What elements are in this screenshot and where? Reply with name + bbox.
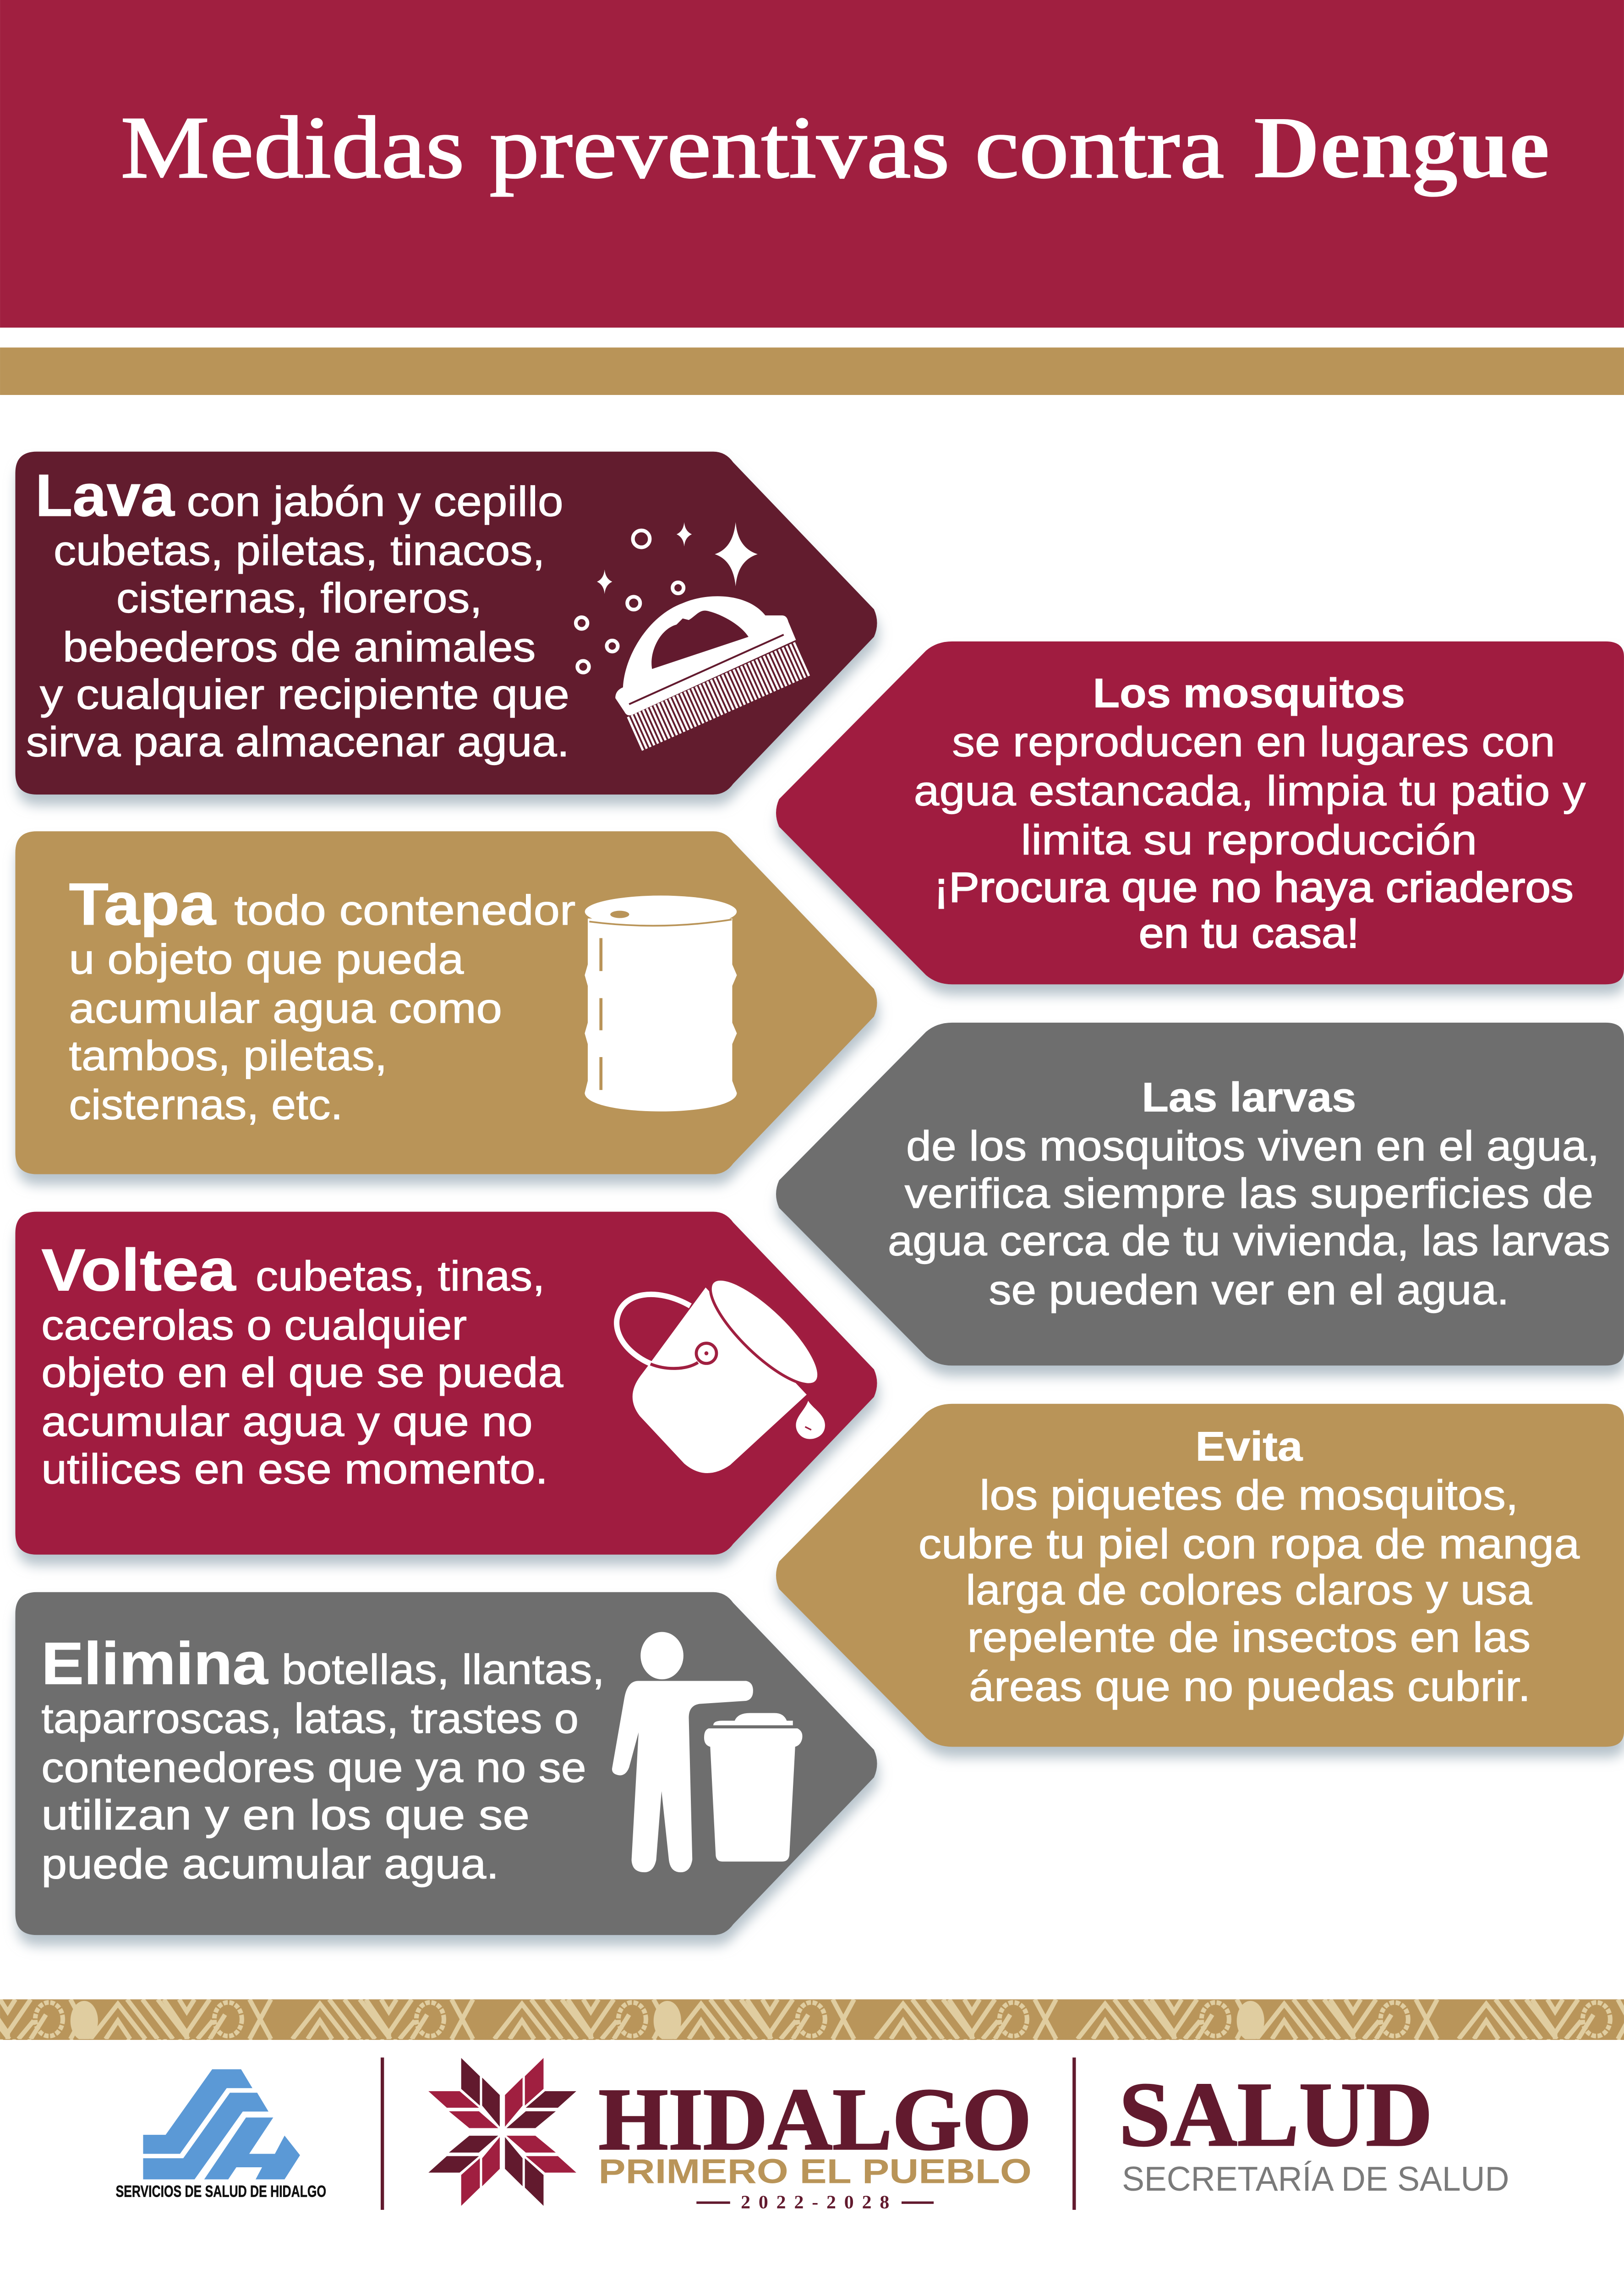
text: Evita: los piquetes de mosquitos, [979,1472,1518,1518]
text: Voltea: Voltea [41,1237,236,1304]
logo: Servicios de Salud de Hidalgo [116,2069,326,2200]
text: Lava: y cualquier recipiente que [40,671,569,718]
panel: Las larvas [776,1023,1624,1365]
text: Voltea [41,1237,564,1493]
arrow shape: Las larvas [776,1023,1624,1365]
icon: brush with sparkles and bubbles [576,522,804,734]
text: Las larvas: verifica siempre las superficies de [905,1170,1593,1217]
text: Tapa: Tapa [69,871,217,937]
icon: drum [585,896,737,1112]
wordmark: Hidalgo primero el pueblo: 2022-2028 [741,2192,889,2213]
logo: Hidalgo star [428,2058,576,2206]
divider left [381,2057,384,2210]
text: Elimina: Elimina [41,1630,268,1697]
text: Los mosquitos: ¡Procura que no haya criaderos [934,864,1574,911]
arrow shape: Elimina [15,1592,877,1935]
ornamental woven band [0,1999,1624,2040]
text: Los mosquitos: Los mosquitos [1093,670,1405,717]
arrow shape: Tapa [15,831,877,1174]
wordmark: Salud, Secretaría de Salud: SECRETARÍA DE SALUD [1122,2159,1509,2198]
icon: person throwing trash in bin [612,1632,802,1872]
text: Lava [26,462,569,766]
text: Tapa: acumular agua como [69,985,502,1032]
title: Dengue [1253,98,1550,197]
text: Voltea: utilices en ese momento. [41,1446,548,1493]
text: Los mosquitos: en tu casa! [1139,910,1359,957]
panel: Voltea [15,1211,877,1555]
text: Evita: Evita [1195,1423,1303,1469]
text: Elimina: puede acumular agua. [41,1841,499,1888]
arrow shape: Los mosquitos [776,641,1624,984]
title [120,98,1550,197]
text: Lava: cisternas, floreros, [116,575,482,621]
wordmark: Hidalgo primero el pueblo: PRIMERO EL PUEBLO [598,2152,1032,2190]
text: Las larvas: Las larvas [1142,1074,1356,1121]
wordmark: Salud, Secretaría de Salud [1119,2064,1509,2198]
arrow shape: Evita [776,1404,1624,1747]
text: Elimina: utilizan y en los que se [41,1792,530,1839]
arrow shape: Lava [15,452,877,795]
panel: Los mosquitos [776,641,1624,984]
panel: Tapa [15,831,877,1174]
text: Elimina: botellas, llantas, [282,1646,605,1693]
title: Medidas preventivas contra [120,98,1224,197]
gold stripe [0,347,1624,395]
text: Voltea: acumular agua y que no [41,1398,533,1445]
text: Los mosquitos [914,670,1586,957]
text: Tapa: todo contenedor [234,887,575,934]
header band [0,0,1624,328]
panel: Elimina [15,1592,877,1935]
text: Lava: bebederos de animales [63,624,536,670]
text: Los mosquitos: agua estancada, limpia tu patio y [914,767,1586,814]
text: Voltea: objeto en el que se pueda [41,1349,564,1396]
text: Elimina [41,1630,605,1888]
panel: Lava [15,452,877,795]
wordmark: Hidalgo primero el pueblo [598,2070,1032,2213]
text: Elimina: taparroscas, latas, trastes o [41,1695,579,1742]
text: Tapa: u objeto que pueda [69,936,464,983]
text: Las larvas: agua cerca de tu vivienda, las larvas [888,1218,1610,1265]
text: Lava: Lava [35,462,175,529]
text: Elimina: contenedores que ya no se [41,1744,586,1791]
text: Evita: repelente de insectos en las [968,1614,1531,1661]
text: Lava: cubetas, piletas, tinacos, [54,527,545,574]
text: Evita: cubre tu piel con ropa de manga [919,1521,1580,1568]
text: Tapa: tambos, piletas, [69,1032,387,1079]
text: Tapa: cisternas, etc. [69,1081,343,1128]
text: Las larvas: de los mosquitos viven en el agua, [906,1123,1599,1170]
text: Evita: larga de colores claros y usa [966,1567,1532,1613]
wordmark: Hidalgo primero el pueblo: HIDALGO [598,2070,1032,2168]
text: Lava: con jabón y cepillo [187,478,563,525]
text: Lava: sirva para almacenar agua. [26,719,569,766]
text: Evita [919,1423,1580,1710]
text: Los mosquitos: se reproducen en lugares con [952,719,1555,766]
text: Las larvas: se pueden ver en el agua. [989,1267,1509,1314]
text: Voltea: cubetas, tinas, [256,1253,545,1300]
arrow shape: Voltea [15,1211,877,1555]
panel: Evita [776,1404,1624,1747]
icon: bucket pouring water [617,1266,832,1473]
text: Voltea: cacerolas o cualquier [41,1302,467,1348]
divider right [1072,2057,1076,2210]
text: Los mosquitos: limita su reproducción [1021,817,1477,863]
text: Las larvas [888,1074,1610,1314]
text: Tapa [69,871,575,1128]
logo: Servicios de Salud de Hidalgo: SERVICIOS DE SALUD DE HIDALGO [116,2182,326,2200]
text: Evita: áreas que no puedas cubrir. [969,1663,1531,1710]
wordmark: Salud, Secretaría de Salud: SALUD [1119,2064,1433,2165]
